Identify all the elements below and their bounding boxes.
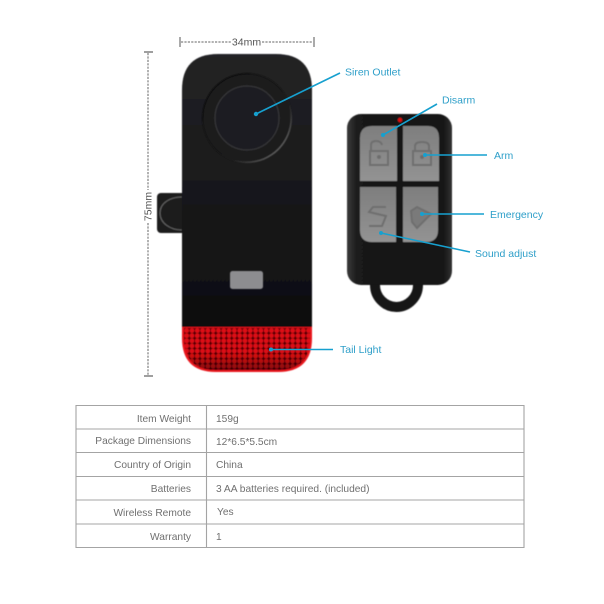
row: warranty: 1 [216, 532, 222, 543]
callout: sound adjust: Sound adjust [475, 248, 536, 260]
specification table [76, 406, 524, 548]
row: warranty [150, 532, 222, 543]
callout: tail light: Tail Light [340, 344, 382, 356]
row: item weight: 159g [216, 414, 239, 425]
callout: disarm: Disarm [442, 94, 476, 106]
row: wireless remote: Wireless Remote [113, 508, 191, 519]
callout: emergency: Emergency [490, 209, 544, 221]
row: warranty: Warranty [150, 532, 192, 543]
row: item weight: Item Weight [137, 414, 191, 425]
dimension: height 75mm [142, 52, 154, 376]
callout: siren outlet [254, 66, 401, 116]
callout: tail light [269, 344, 382, 356]
callout: emergency [420, 209, 544, 221]
dimension: width 34mm: 34mm [232, 36, 261, 48]
remote control [347, 114, 452, 285]
row: country of origin: China [216, 460, 243, 471]
callout: sound adjust [379, 231, 536, 260]
alarm device body [182, 54, 312, 372]
row: country of origin [114, 460, 243, 471]
tail light [182, 327, 312, 372]
row: wireless remote: Yes [217, 507, 234, 518]
row: package dimensions: 12*6.5*5.5cm [216, 437, 277, 448]
siren speaker [202, 73, 292, 163]
callout: arm [423, 150, 514, 162]
dimension: height 75mm: 75mm [142, 192, 154, 221]
callout: arm: Arm [494, 150, 514, 162]
icon: mounting clip [157, 193, 187, 233]
dimension: width 34mm [180, 36, 314, 48]
row: item weight [137, 414, 239, 425]
icon: key ring [375, 278, 418, 307]
callout: disarm [381, 94, 476, 137]
row: batteries: 3 AA batteries required. (included) [216, 484, 369, 495]
row: batteries: Batteries [151, 484, 191, 495]
row: country of origin: Country of Origin [114, 460, 191, 471]
row: package dimensions: Package Dimensions [95, 436, 191, 447]
row: package dimensions [95, 436, 277, 448]
callout: siren outlet: Siren Outlet [345, 66, 401, 78]
status window [230, 271, 263, 289]
button: disarm [360, 126, 397, 181]
LED [398, 118, 402, 122]
button: arm [403, 126, 439, 181]
button: emergency [403, 187, 438, 242]
button: sound adjust [360, 187, 396, 242]
row: wireless remote [113, 507, 234, 519]
